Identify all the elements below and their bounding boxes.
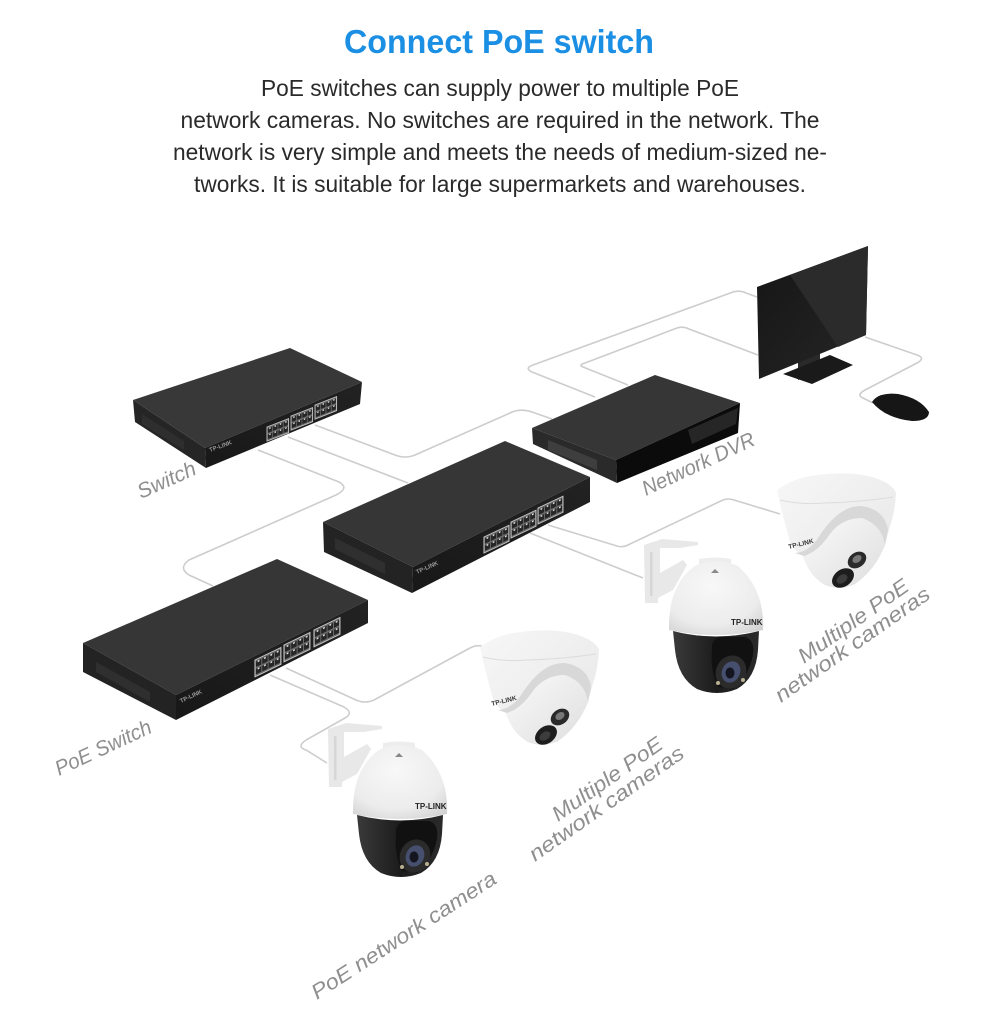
- icon: multiple network dome camera, right: [777, 473, 896, 592]
- label: Multiple PoE network cameras, right: Multiple PoE: [794, 574, 914, 668]
- monitor: [757, 246, 868, 384]
- label: Network DVR: Network DVR: [638, 428, 759, 501]
- label: PoE network camera: PoE network camera: [307, 867, 501, 1004]
- network cables: [184, 291, 922, 763]
- mouse: [872, 394, 929, 421]
- PoE switch: [83, 559, 368, 720]
- central PoE switch: TP-LINK: [415, 560, 440, 576]
- description text block: network is very simple and meets the needs of medium-sized ne-: [173, 139, 827, 165]
- network DVR: [532, 375, 740, 483]
- title: Connect PoE switch: [344, 23, 654, 60]
- label: Multiple PoE network cameras, left: Multiple PoE: [548, 732, 668, 826]
- central PoE switch: [323, 441, 590, 593]
- icon: PTZ network camera, right: [644, 539, 763, 694]
- label: Switch: Switch: [134, 457, 200, 504]
- label: Multiple PoE network cameras, left: network cameras: [525, 741, 689, 866]
- icon: PTZ network camera, left: [328, 723, 447, 878]
- icon: multiple network dome camera, left: [480, 630, 599, 749]
- PoE switch: TP-LINK: [179, 689, 204, 705]
- label: Multiple PoE network cameras, right: network cameras: [771, 582, 935, 707]
- description text block: network cameras. No switches are required in the network. The: [180, 107, 820, 133]
- description text block: PoE switches can supply power to multiple PoE: [261, 75, 739, 101]
- switch: TP-LINK: [209, 440, 234, 454]
- label: PoE Switch: PoE Switch: [51, 716, 155, 781]
- switch: [133, 348, 362, 468]
- description text block: tworks. It is suitable for large supermarkets and warehouses.: [194, 171, 806, 197]
- description text block: [173, 75, 827, 197]
